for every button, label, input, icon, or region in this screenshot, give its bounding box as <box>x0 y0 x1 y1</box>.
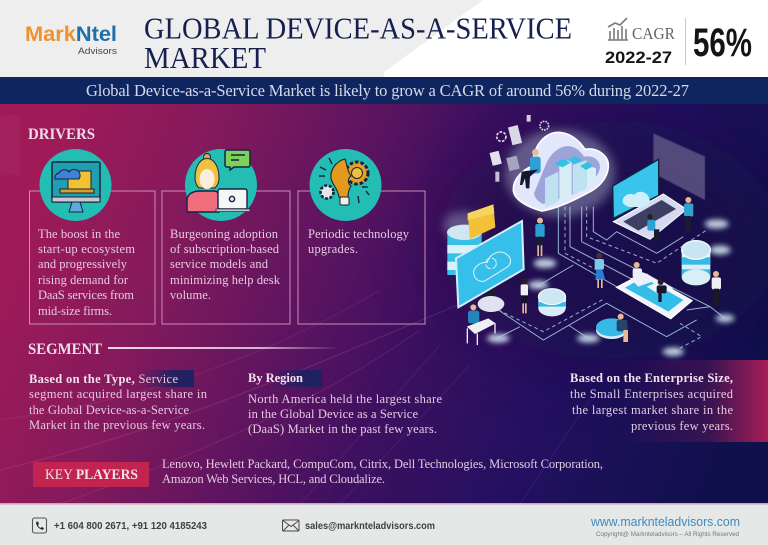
CAGR badge <box>605 18 752 67</box>
text block: segment by region <box>248 370 442 436</box>
logo: MarkNtel Advisors: Advisors <box>78 46 117 57</box>
text: driver 1: start-up ecosystem <box>38 242 135 256</box>
icon: growth chart <box>608 18 628 40</box>
banner <box>0 77 768 104</box>
heading: segment: SEGMENT <box>28 341 102 358</box>
small data cylinder <box>538 289 566 316</box>
text block: segment by type: Based on the Type, Service <box>29 372 178 386</box>
text block: segment by type <box>29 370 208 432</box>
main background panel <box>0 104 768 504</box>
CAGR badge: CAGR <box>632 24 675 43</box>
text: driver 1: The boost in the <box>38 227 120 241</box>
text block: segment by enterprise size: previous few years. <box>631 419 733 433</box>
website: www.marknteladvisors.com <box>590 514 740 529</box>
heading: drivers: DRIVERS <box>28 126 95 143</box>
text block: segment by enterprise size: the largest market share in the <box>572 403 733 417</box>
text: driver 1: and progressively <box>38 257 128 271</box>
header background <box>0 0 768 77</box>
people <box>467 197 721 345</box>
title: GLOBAL DEVICE-AS-A-SERVICE <box>144 12 572 46</box>
email: sales@marknteladvisors.com <box>305 520 435 532</box>
key players label: KEY PLAYERS <box>45 467 138 483</box>
glow spots <box>443 130 734 356</box>
title: MARKET <box>144 41 266 75</box>
text: driver 1: mid-size firms. <box>38 304 112 318</box>
text block: segment by region: (DaaS) Market in the past few years. <box>248 422 437 436</box>
icon: phone <box>32 518 46 533</box>
text: driver 1 <box>38 227 135 318</box>
icon: idea bulb with gears <box>310 149 382 221</box>
disc platform <box>596 318 627 339</box>
text: driver 2 <box>170 227 281 302</box>
text: driver 2: minimizing help desk <box>170 273 281 287</box>
icons: floating files <box>490 115 549 182</box>
phone numbers: +1 604 800 2671, +91 120 4185243 <box>54 520 207 532</box>
title <box>144 12 572 75</box>
right data cylinder <box>682 241 710 285</box>
desktop monitor <box>456 221 524 312</box>
text: driver 2: of subscription-based <box>170 242 280 256</box>
text: driver 3: Periodic technology <box>308 227 410 241</box>
text: driver 2: Burgeoning adoption <box>170 227 279 241</box>
text: driver 3 <box>308 227 410 256</box>
text block: segment by region: in the Global Device as a Service <box>248 407 418 421</box>
illustration: cloud data network <box>443 115 734 356</box>
text: driver 1: DaaS services from <box>38 288 134 302</box>
footer <box>0 503 768 545</box>
panel: driver 1 <box>30 149 155 324</box>
key players label <box>33 462 149 487</box>
banner: Global Device-as-a-Service Market is likely to grow a CAGR of around 56% during 2022-27 <box>86 81 689 100</box>
text block: segment by enterprise size <box>570 360 768 442</box>
text block: segment by type: the Global Device-as-a-Service <box>29 403 189 417</box>
icon: envelope <box>282 520 299 531</box>
person on cloud <box>520 149 541 188</box>
copyright: Copyright@ Marknteladvisors – All Rights Reserved <box>596 532 739 538</box>
key players list <box>162 457 603 486</box>
panel: driver 3 <box>298 149 425 324</box>
logo: MarkNtel Advisors: MarkNtel <box>25 23 117 46</box>
text block: segment by enterprise size: the Small Enterprises acquired <box>570 387 734 401</box>
text block: segment by type: segment acquired largest share in <box>29 387 208 401</box>
text: driver 2: service models and <box>170 257 269 271</box>
text: driver 1: rising demand for <box>38 273 129 287</box>
circuit lines <box>497 207 725 352</box>
panel: driver 2 <box>162 149 290 324</box>
text block: segment by region: By Region <box>248 371 303 385</box>
laptop <box>613 159 687 239</box>
key players list: Amazon Web Services, HCL, and Cloudalize. <box>162 472 385 486</box>
cloud with servers <box>513 132 608 211</box>
text block: segment by enterprise size: Based on the Enterprise Size, <box>570 371 733 385</box>
CAGR badge: 2022-27 <box>605 48 672 67</box>
cylinder stack left with folder <box>447 204 495 275</box>
smartphone platform <box>617 273 692 319</box>
grey data panel <box>653 133 705 200</box>
icon: support agent <box>185 149 257 221</box>
key players list: Lenovo, Hewlett Packard, CompuCom, Citrix, Dell Technologies, Microsoft Corporation, <box>162 457 603 471</box>
text: driver 2: volume. <box>170 288 211 302</box>
text block: segment by region: North America held the largest share <box>248 392 442 406</box>
text block: segment by type: Market in the previous few years. <box>29 418 205 432</box>
text: driver 3: upgrades. <box>308 242 358 256</box>
logo: MarkNtel Advisors <box>25 23 117 57</box>
icon: monitor with cloud <box>40 149 112 221</box>
